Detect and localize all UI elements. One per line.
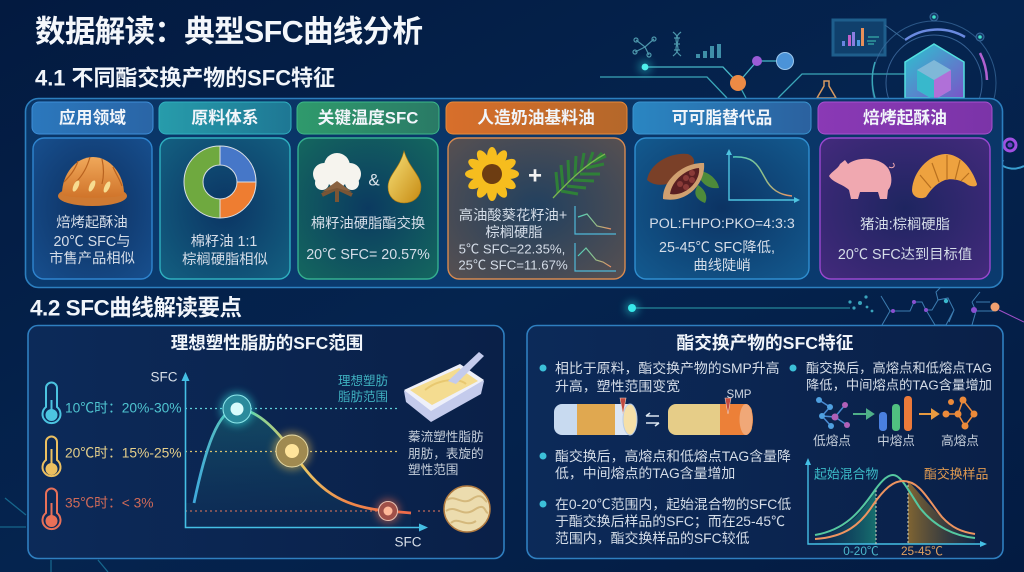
bullet: temperature ranges: [540, 496, 791, 546]
mini chart: SFC at 5 degrees: [575, 206, 616, 234]
decor: right side ring: [992, 129, 1024, 169]
label: ideal plastic fat range: 脂肪范围: [338, 389, 388, 404]
bullet: TAG content left: [540, 448, 791, 481]
title: 数据解读：典型SFC曲线分析: [35, 15, 423, 49]
bullet: SMP rises: 升高，塑性范围变宽: [555, 378, 680, 394]
bullet: temperature ranges: 在0-20℃范围内，起始混合物的SFC低: [555, 496, 791, 512]
bullet: TAG content right: [790, 360, 992, 392]
header: key temperature: 关键温度SFC: [318, 108, 418, 128]
chart: SFC curve: SFC: [394, 534, 422, 550]
text: POL formula: [649, 216, 795, 274]
donut chart: [184, 146, 256, 218]
bullet: temperature ranges: 于酯交换后样品的SFC；而在25-45℃: [555, 513, 785, 530]
column: raw material: [159, 102, 291, 279]
marker: 10 degrees point: [220, 392, 254, 426]
mini chart: SFC at 25 degrees: [575, 243, 616, 271]
card: raw material system: [160, 138, 290, 279]
label: 10 degrees range: 10℃时：20%-30%: [65, 400, 182, 416]
text: POL formula: POL:FHPO:PKO=4:3:3: [649, 216, 795, 232]
icon: palm leaf: [553, 152, 606, 198]
text: plastic range note: 蓁流塑性脂肪: [408, 429, 484, 444]
bullet: TAG content right: 降低，中间熔点的TAG含量增加: [806, 378, 992, 392]
header: cocoa butter replacer: 可可脂替代品: [672, 108, 772, 128]
text: lard result: [838, 216, 972, 263]
header: raw material: [159, 102, 291, 134]
icon: pig: [829, 159, 894, 199]
label: middle melting: 中熔点: [877, 434, 915, 448]
icon: oil drop: [388, 151, 421, 203]
panel: product table: [26, 98, 1002, 288]
text: bakery description: 20℃ SFC与: [53, 233, 131, 250]
bullet: SMP rises: 相比于原料，酯交换产物的SMP升高: [555, 360, 780, 376]
label: low temperature range: 0-20℃: [843, 544, 879, 558]
marker: 35 degrees point: [376, 499, 400, 523]
text: blend composition: 25℃ SFC=11.67%: [458, 258, 568, 272]
card: sunflower and palm: [448, 138, 625, 279]
decor: middle network line: [625, 286, 1024, 325]
arrow: green: [853, 410, 873, 418]
text: cottonseed result: [306, 214, 430, 263]
text: blend composition: [458, 207, 568, 272]
label: low melting: 低熔点: [813, 434, 851, 448]
card: cottonseed: [298, 138, 438, 279]
bullet: temperature ranges: 范围内，酯交换样品的SFC较低: [555, 530, 750, 546]
heading 4.1: 4.1 不同酯交换产物的SFC特征: [35, 66, 335, 90]
bullet: TAG content left: 低，中间熔点的TAG含量增加: [555, 465, 735, 481]
bullet: TAG content left: 酯交换后，高熔点和低熔点TAG含量降: [555, 448, 791, 464]
text: bakery description: [49, 214, 135, 267]
icon: croissant: [912, 154, 977, 198]
text: cottonseed result: 20℃ SFC= 20.57%: [306, 247, 430, 263]
column: margarine base oil: [446, 102, 627, 279]
text: ratio: 棕榈硬脂相似: [182, 251, 268, 268]
symbol: plus: +: [528, 162, 542, 190]
icon: high melting molecule: [942, 396, 978, 430]
panel: ideal plastic fat SFC range: [28, 326, 504, 558]
text: lard result: 猪油:棕榈硬脂: [860, 216, 950, 233]
equilibrium arrows: [646, 413, 659, 426]
chart: SFC curve: SFC: [150, 370, 178, 384]
header: application: 应用领域: [59, 108, 126, 128]
card: bakery shortening: [33, 138, 152, 279]
panel heading: 理想塑性脂肪的SFC范围: [171, 333, 363, 353]
marker: 20 degrees point: [273, 432, 311, 470]
header: margarine: [446, 102, 627, 134]
icon: cotton: [313, 153, 361, 202]
decor: left side network: [0, 498, 108, 572]
marker arrow before: [620, 398, 626, 414]
text: POL formula: 曲线陡峭: [693, 257, 751, 274]
text: ratio: [182, 233, 268, 268]
heading 4.2: 4.2 SFC曲线解读要点: [30, 296, 242, 320]
bullet: TAG content right: 酯交换后，高熔点和低熔点TAG: [806, 360, 992, 376]
symbol: ampersand: &: [368, 170, 380, 190]
text: blend composition: 5℃ SFC=22.35%,: [459, 242, 565, 256]
text: cottonseed result: 棉籽油硬脂酯交换: [311, 214, 425, 232]
label: starting mixture: 起始混合物: [814, 466, 879, 482]
column: cocoa butter replacer: [633, 102, 811, 279]
icon: thermometer 20 degrees: [42, 437, 61, 476]
icon: sunflower: [465, 147, 519, 201]
header: margarine: 人造奶油基料油: [477, 108, 595, 128]
panel heading: 酯交换产物的SFC特征: [677, 332, 854, 353]
icon: middle melting bars: [879, 396, 912, 431]
label: interesterified sample: 酯交换样品: [924, 466, 988, 482]
icon: low melting molecule: [816, 397, 850, 429]
arrow: orange: [919, 410, 938, 418]
label: SMP: SMP: [727, 389, 752, 401]
text: lard result: 20℃ SFC达到目标值: [838, 246, 972, 263]
column: bakery shortening: [818, 102, 992, 279]
label: 35 degrees range: 35℃时：< 3%: [65, 496, 154, 510]
label: 20 degrees range: 20℃时：15%-25%: [65, 446, 182, 460]
label: high temperature range: 25-45℃: [901, 544, 943, 558]
icon: butter tub: [404, 352, 484, 422]
bullet: SMP rises: [540, 360, 780, 394]
column: application field: [32, 102, 153, 279]
text: bakery description: 市售产品相似: [49, 250, 135, 267]
header: raw material: 原料体系: [191, 108, 259, 128]
icon: thermometer 10 degrees: [42, 382, 61, 423]
marker arrow after: [725, 398, 731, 414]
header: application: [32, 102, 153, 134]
text: blend composition: 棕榈硬脂: [485, 224, 543, 241]
panel: interesterified product SFC characteristics: [527, 326, 1003, 558]
diagram: SMP tubes: [554, 389, 753, 435]
header: key temperature: [297, 102, 439, 134]
chart: SFC distribution curves: [805, 458, 988, 558]
tube after: [668, 404, 753, 435]
card: cocoa: [635, 138, 809, 279]
text: blend composition: 高油酸葵花籽油+: [459, 207, 567, 224]
text: plastic range note: 朋肪，表旋的: [408, 446, 484, 461]
chart: steep SFC curve: [726, 149, 800, 203]
label: ideal plastic fat range: [338, 373, 388, 404]
text: POL formula: 25-45℃ SFC降低,: [659, 239, 775, 256]
card: lard and palm stearin: [820, 138, 990, 279]
header: bakery: [818, 102, 992, 134]
icon: thermometer 35 degrees: [42, 488, 61, 529]
column: key temperature SFC: [297, 102, 439, 279]
text: plastic range note: [408, 429, 484, 477]
header: bakery: 焙烤起酥油: [863, 108, 947, 128]
icon: cocoa pod: [647, 154, 719, 203]
header: cocoa butter replacer: [633, 102, 811, 134]
decor: top right circuit and technology icons: [600, 13, 996, 145]
icon: bread: [58, 157, 127, 206]
text: bakery description: 焙烤起酥油: [56, 214, 128, 231]
chart: SFC curve: [150, 370, 443, 550]
label: ideal plastic fat range: 理想塑肪: [338, 373, 388, 388]
diagram: melting point conversion: [813, 396, 979, 448]
text: plastic range note: 塑性范围: [408, 463, 458, 477]
icon: fat texture circle: [444, 486, 490, 532]
label: high melting: 高熔点: [941, 433, 979, 448]
tube before: [554, 404, 637, 435]
text: ratio: 棉籽油 1:1: [191, 233, 257, 250]
